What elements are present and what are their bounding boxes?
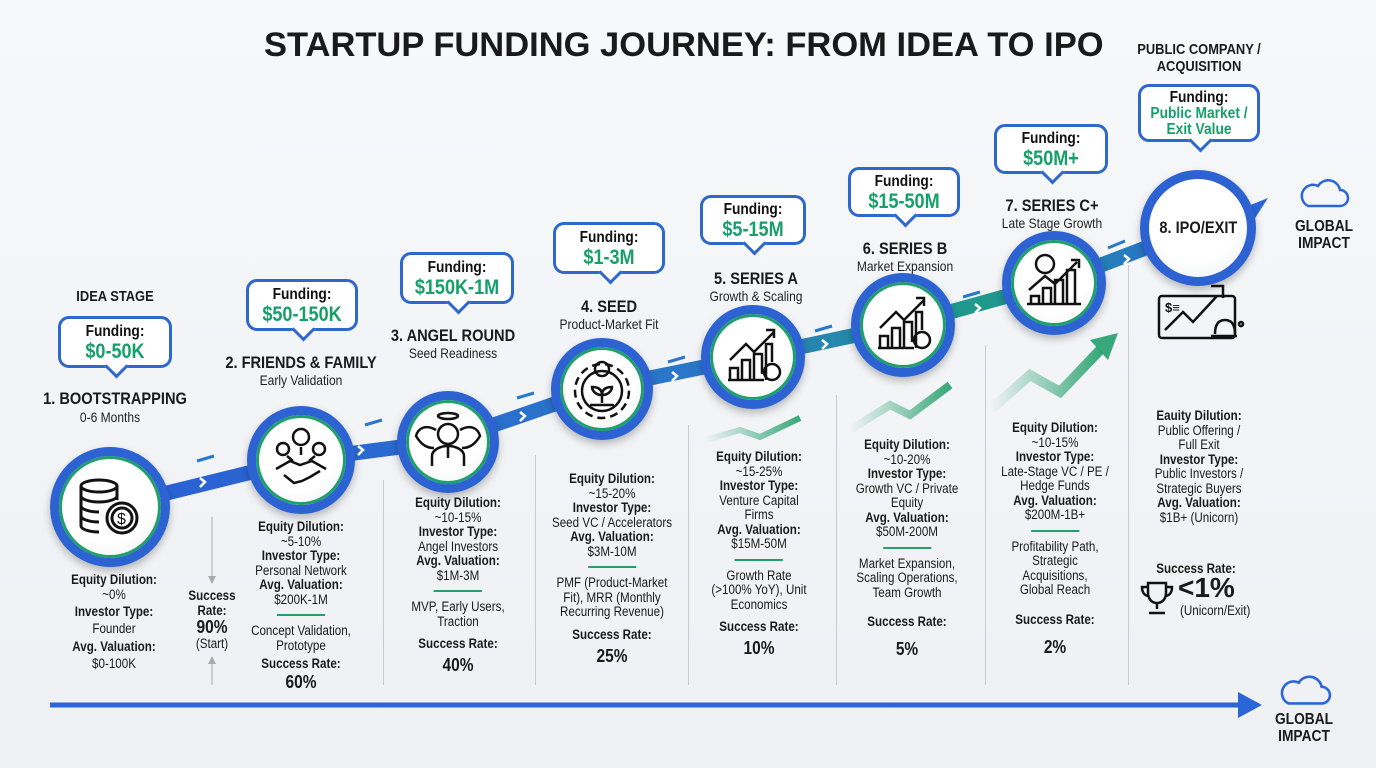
icon: dollar growth buildings — [1002, 231, 1106, 335]
stage 1 — [43, 288, 236, 670]
text: $1-3M — [583, 246, 635, 269]
text: ~5-10% — [281, 534, 321, 548]
text: (>100% YoY), Unit — [711, 582, 807, 597]
text: Avg. Valuation: — [570, 529, 654, 544]
text: Hedge Funds — [1020, 478, 1090, 493]
text: Equity Dilution: — [569, 471, 655, 486]
bubble: $0-50K — [85, 340, 145, 363]
text: Funding: — [580, 229, 638, 246]
stage 7 — [994, 124, 1110, 656]
text: Equity Dilution: — [1012, 420, 1098, 435]
text: ~10-15% — [435, 510, 481, 524]
text: Investor Type: — [419, 524, 497, 539]
text: ~15-20% — [589, 486, 635, 500]
text: Success Rate: — [572, 626, 652, 642]
text: $0-100K — [92, 656, 136, 670]
text: Equity Dilution: — [258, 519, 344, 534]
stage 8 — [1136, 41, 1261, 618]
text: Investor Type: — [573, 500, 651, 515]
text: Equity Dilution: — [71, 572, 157, 587]
text: $3M-10M PMF (Product-Market — [557, 544, 667, 590]
text: Full Exit — [1178, 437, 1220, 452]
text: 7. SERIES C+ — [1005, 196, 1099, 215]
text: Firms — [744, 507, 774, 522]
icon: stock board — [1158, 284, 1244, 340]
text: 25% — [596, 646, 627, 666]
text: Investor Type: — [720, 478, 798, 493]
title: STARTUP FUNDING JOURNEY: FROM IDEA TO IPO — [264, 26, 1104, 64]
text: 90% — [196, 617, 227, 637]
text: Eauity Dilution: — [1156, 408, 1242, 423]
text: Success Rate: — [719, 619, 799, 634]
stage 3 — [391, 252, 515, 675]
text: Public Market / — [1150, 105, 1248, 122]
text: Avg. Valuation: — [865, 510, 949, 524]
circle: IPO/EXIT — [1140, 170, 1256, 286]
text: GLOBAL — [1275, 711, 1333, 728]
text: Public Investors / — [1155, 466, 1243, 481]
circle: IPO/EXIT: 8. IPO/EXIT — [1159, 218, 1237, 237]
text: Avg. Valuation: — [416, 553, 500, 568]
text: Fit), MRR (Monthly — [563, 590, 661, 604]
text: Product-Market Fit — [559, 316, 659, 332]
text: Scaling Operations, — [856, 570, 958, 585]
text: Team Growth — [872, 584, 942, 600]
text: Equity Dilution: — [415, 495, 501, 510]
text: Seed VC / Accelerators — [552, 514, 672, 530]
text: Equity Dilution: — [716, 449, 802, 464]
text: $5-15M — [722, 218, 784, 241]
text: Prototype — [276, 638, 326, 652]
icon: cloud bottom — [1280, 676, 1332, 705]
icon: handshake network — [247, 406, 355, 514]
text: $1B+ (Unicorn) — [1160, 510, 1238, 524]
text: 60% — [285, 672, 316, 692]
bottom arrow — [50, 702, 1245, 708]
text: $50M+ — [1023, 147, 1079, 170]
text: $200M-1B+ Profitability Path, — [1011, 507, 1099, 554]
stage 6 — [847, 167, 960, 659]
stage 5 — [697, 195, 809, 658]
text: ~15-25% — [736, 464, 782, 478]
text: Economics — [731, 596, 787, 612]
bubble — [58, 316, 172, 368]
text: $50M-200M Market Expansion, — [859, 524, 955, 570]
icon: cloud top — [1300, 179, 1350, 208]
text: Personal Network — [255, 562, 347, 578]
text: 2% — [1044, 636, 1066, 656]
text: Growth VC / Private — [856, 480, 958, 496]
text: Seed Readiness — [409, 345, 497, 361]
text: Avg. Valuation: — [259, 577, 343, 592]
text: Success — [188, 588, 236, 603]
text: Global Reach — [1020, 582, 1090, 597]
text: ~0% — [102, 586, 126, 602]
text: Success Rate: — [418, 636, 498, 651]
text: Rate: — [197, 602, 227, 618]
text: 1. BOOTSTRAPPING — [43, 389, 187, 408]
text: $200K-1M Concept Validation, — [251, 592, 351, 638]
text: Recurring Revenue) — [560, 604, 664, 619]
text: Exit Value — [1166, 121, 1232, 138]
text: 4. SEED — [581, 297, 637, 316]
text: Funding: — [875, 173, 933, 190]
text: $15M-50M Growth Rate — [726, 536, 792, 582]
text: Investor Type: — [1160, 452, 1238, 466]
text: Equity Dilution: — [864, 437, 950, 452]
text: Public Offering / — [1158, 422, 1240, 438]
text: Early Validation — [260, 372, 342, 388]
text: Venture Capital — [719, 492, 799, 508]
text: 3. ANGEL ROUND — [391, 326, 515, 345]
text: 6. SERIES B — [863, 239, 947, 258]
text: ~10-15% — [1032, 434, 1078, 450]
text: ACQUISITION — [1157, 58, 1241, 75]
text: Strategic Buyers — [1156, 480, 1242, 496]
text: Angel Investors — [418, 538, 498, 554]
icon: gear plant — [551, 338, 653, 440]
text: IDEA STAGE — [76, 288, 154, 305]
text: Traction — [437, 614, 479, 628]
text: Funding: — [1170, 89, 1228, 106]
text: 40% — [443, 655, 473, 675]
text: $1M-3M MVP, Early Users, — [411, 568, 505, 614]
text: Market Expansion — [857, 258, 953, 274]
text: Investor Type: — [262, 548, 340, 563]
text: IMPACT — [1298, 235, 1350, 252]
text: Avg. Valuation: — [1157, 495, 1241, 510]
bubble: Funding: — [86, 323, 144, 340]
text: IMPACT — [1278, 728, 1330, 745]
text: Late-Stage VC / PE / — [1001, 464, 1109, 478]
text: Success Rate: — [1015, 612, 1095, 626]
text: (Unicorn/Exit) — [1180, 603, 1250, 618]
text: PUBLIC COMPANY / — [1137, 41, 1261, 58]
text: Acquisitions, — [1022, 568, 1088, 582]
icon: angel — [397, 391, 499, 493]
text: Investor Type: — [1016, 449, 1094, 464]
text: 2. FRIENDS & FAMILY — [225, 353, 377, 372]
text: Strategic — [1032, 553, 1078, 568]
icon: coins — [50, 447, 170, 567]
icon: growth chart — [701, 305, 805, 409]
icon: chart with dollar — [851, 273, 955, 377]
text: Founder — [92, 621, 136, 636]
text: $150K-1M — [415, 276, 499, 299]
text: Funding: — [1022, 130, 1080, 147]
text: Investor Type: — [868, 466, 946, 481]
text: Success Rate: — [867, 614, 947, 629]
text: 5% — [896, 639, 918, 659]
text: 5. SERIES A — [714, 269, 798, 288]
text: Growth & Scaling — [709, 288, 803, 304]
icon: stock board: $≡ — [1165, 300, 1180, 315]
text: $50-150K — [262, 303, 342, 326]
text: Funding: — [273, 286, 331, 303]
text: (Start) — [196, 636, 228, 651]
text: Investor Type: — [75, 604, 153, 619]
text: Avg. Valuation: — [1013, 492, 1097, 508]
text: GLOBAL — [1295, 218, 1353, 235]
text: 10% — [743, 638, 774, 658]
text: Equity — [891, 495, 923, 510]
text: Avg. Valuation: — [72, 638, 156, 654]
text: Avg. Valuation: — [717, 522, 801, 536]
text: Late Stage Growth — [1002, 215, 1102, 231]
text: ~10-20% — [884, 452, 930, 466]
stage 2 — [225, 279, 377, 692]
text: Success Rate: — [261, 656, 341, 671]
stage 4 — [547, 222, 672, 666]
icon: coins: $ — [117, 511, 126, 528]
text: Funding: — [428, 259, 486, 276]
text: 0-6 Months — [80, 409, 140, 425]
text: Funding: — [724, 201, 782, 218]
text: <1% — [1178, 572, 1235, 603]
text: $15-50M — [868, 190, 940, 213]
text: Success Rate: — [1156, 561, 1236, 576]
icon: trophy — [1140, 582, 1174, 614]
